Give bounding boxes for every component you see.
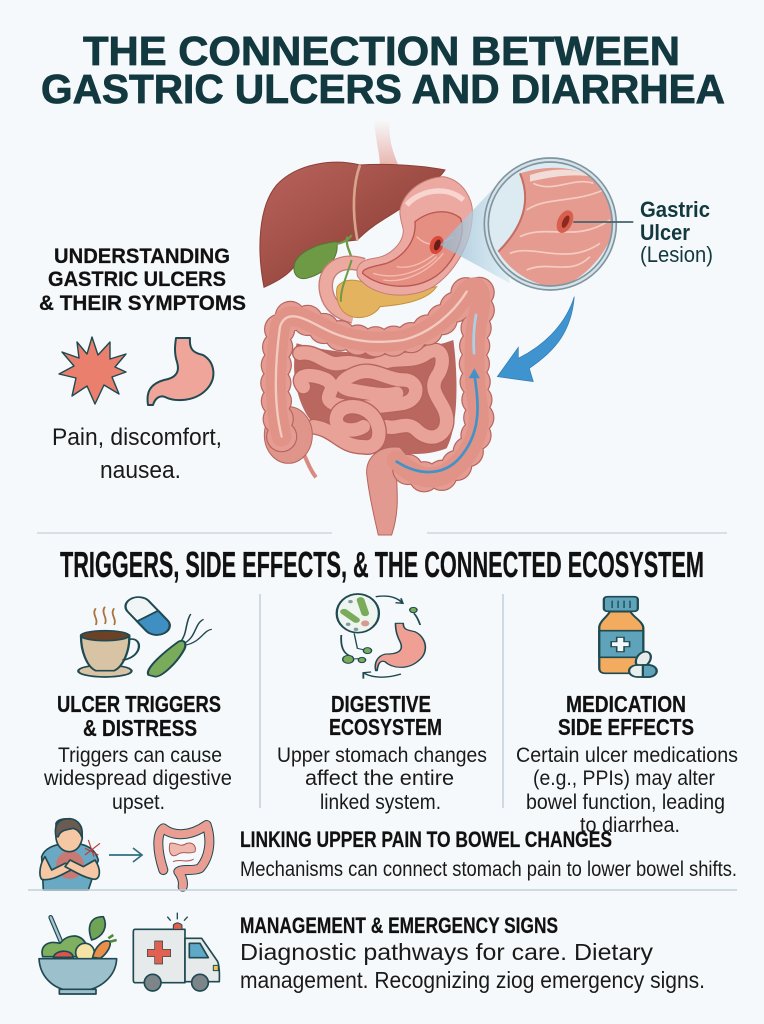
callout: gastric ulcer (640, 197, 713, 267)
column 2: digestive ecosystem: ECOSYSTEM (329, 714, 442, 740)
column 3: medication side effects: SIDE EFFECTS (558, 714, 694, 740)
icon: ambulance (133, 913, 219, 991)
column 3: medication side effects: (e.g., PPIs) may alter (533, 767, 715, 790)
column 2: digestive ecosystem: affect the entire (305, 767, 454, 790)
text: symptoms: Pain, discomfort, (52, 424, 222, 451)
column 1: ulcer triggers: & DISTRESS (83, 715, 197, 741)
text: symptoms (52, 424, 222, 484)
stomach inner wall (363, 212, 462, 286)
icon: triggers (78, 593, 212, 677)
steam (94, 607, 115, 625)
magnifier cone (440, 185, 510, 283)
capsule (120, 593, 175, 639)
icon: intestines (158, 825, 209, 887)
arrow: pain to bowel (109, 848, 142, 862)
colon and small intestine (264, 287, 480, 535)
magnifying lens (486, 160, 618, 288)
column 1: ulcer triggers (43, 691, 232, 814)
flow arrow inside colon (397, 315, 480, 472)
icon: pain starburst (59, 337, 126, 404)
column 1: ulcer triggers: ULCER TRIGGERS (57, 691, 221, 717)
row divider (28, 889, 737, 891)
pills (633, 650, 654, 669)
column 3: medication side effects: to diarrhea. (580, 814, 680, 837)
text: symptoms: nausea. (100, 457, 181, 484)
bacterium (148, 641, 185, 677)
green dots (410, 607, 417, 613)
rectum (367, 447, 413, 535)
large intestine (276, 287, 480, 477)
ulcer leader line (573, 219, 633, 224)
row 2: management and emergency signs: management. Recognizing ziog emergency signs. (240, 967, 705, 993)
column 3: medication side effects: Certain ulcer medications (516, 744, 738, 767)
liver (260, 162, 445, 287)
appendix and cecum (264, 407, 316, 477)
stomach (375, 623, 425, 671)
heading: understanding ulcers: & THEIR SYMPTOMS (39, 292, 246, 315)
duodenum (326, 263, 363, 317)
icon: stomach (148, 338, 213, 405)
title: THE CONNECTION BETWEEN (83, 28, 680, 74)
column 1: ulcer triggers: Triggers can cause (58, 744, 222, 767)
ulcer (427, 234, 446, 256)
row 1: linking upper pain: LINKING UPPER PAIN TO BOWEL CHANGES (240, 827, 612, 852)
callout: gastric ulcer: Gastric (640, 197, 710, 222)
column 1: ulcer triggers: upset. (112, 791, 165, 814)
blue arrow (497, 297, 574, 382)
column 3: medication side effects: MEDICATION (566, 691, 686, 717)
icon: digestive ecosystem (337, 594, 425, 679)
microbiome circle (337, 594, 379, 633)
gallbladder (294, 235, 352, 279)
small intestine (294, 340, 456, 454)
column 3: medication side effects (516, 691, 738, 837)
icon: person with stomach pain (40, 819, 100, 890)
heading: understanding ulcers: UNDERSTANDING (54, 245, 230, 268)
cycle arrows (341, 596, 420, 679)
cup (81, 635, 129, 671)
title: GASTRIC ULCERS AND DIARRHEA (41, 66, 725, 112)
icon: salad bowl (39, 917, 117, 994)
row 2: management and emergency signs (240, 913, 705, 993)
column dividers (260, 594, 503, 808)
section divider (37, 532, 727, 534)
column 1: ulcer triggers: widespread digestive (43, 767, 232, 790)
heading: understanding ulcers (39, 245, 246, 315)
stomach (357, 177, 472, 295)
digestive system illustration (260, 120, 633, 535)
column 2: digestive ecosystem: DIGESTIVE (331, 691, 431, 717)
row 1: linking upper pain (240, 827, 737, 881)
saucer (78, 665, 132, 677)
column 2: digestive ecosystem: linked system. (320, 791, 441, 814)
column 2: digestive ecosystem: Upper stomach changes (277, 744, 487, 767)
row 2: management and emergency signs: MANAGEMENT & EMERGENCY SIGNS (240, 913, 558, 938)
heading: understanding ulcers: GASTRIC ULCERS (48, 268, 226, 291)
row 2: management and emergency signs: Diagnostic pathways for care. Dietary (240, 939, 654, 965)
column 2: digestive ecosystem (277, 691, 487, 814)
title (41, 28, 725, 112)
callout: gastric ulcer: Ulcer (640, 220, 690, 245)
icon: medication bottle (599, 597, 657, 677)
pancreas (337, 280, 437, 318)
callout: gastric ulcer: (Lesion) (640, 242, 713, 267)
esophagus (374, 120, 398, 167)
column 3: medication side effects: bowel function, leading (526, 791, 725, 814)
